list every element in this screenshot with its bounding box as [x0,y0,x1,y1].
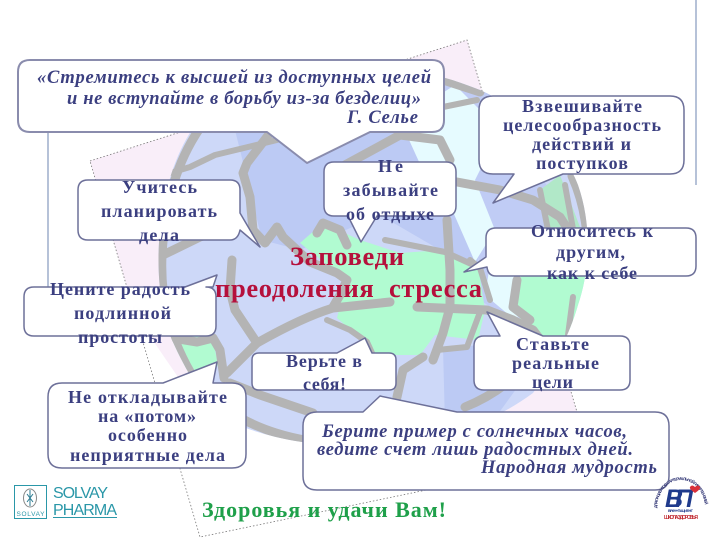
heading: Заповеди [290,241,404,271]
callout: realistic goals [474,312,630,392]
callout: sundial proverb: Берите пример с солнечных часов, [321,422,627,442]
callout: do not postpone: на «потом» [98,406,196,426]
callout: rest: Не [378,156,403,176]
callout: Selye quote: Г. Селье [346,108,418,128]
callout: weigh actions: действий и [532,134,631,154]
decorative side line right [695,0,697,185]
callout: treat others: как к себе [547,263,637,283]
heading: преодоления стресса [215,273,482,303]
callout: do not postpone: особенно [108,425,187,445]
closing wish: Здоровья и удачи Вам! [202,497,446,522]
callout: treat others [464,221,696,283]
logo: Solvay Pharma: SOLVAY [53,485,108,502]
callout: sundial proverb: ведите счет лишь радостных дней. [317,440,633,460]
callout: plan: дела [139,225,179,245]
callout: sundial proverb: Народная мудрость [480,458,657,478]
callout: Selye quote: и не вступайте в борьбу из-за безделиц» [67,89,421,109]
callout: plan: Учитесь [122,177,197,197]
callout: do not postpone: Не откладывайте [68,387,227,407]
heading [215,241,482,303]
logo: school of health: ШКОЛА ЗДОРОВЬЯ [664,515,698,521]
callout: treat others: Относитесь к [531,221,654,241]
logo: school of health: ВП [665,485,694,513]
callout: do not postpone [48,362,246,468]
callout: weigh actions: поступков [536,153,628,173]
callout: rest: об отдыхе [346,204,434,224]
callout: weigh actions [479,96,684,203]
callout: believe in yourself: себя! [303,374,346,394]
globe background image [90,40,610,537]
callout: rest [324,156,456,242]
callout: rest: забывайте [343,180,438,200]
callout: weigh actions: целесообразность [503,115,661,135]
callout: Selye quote: «Стремитесь к высшей из доступных целей [37,68,431,88]
callout: simplicity: Цените радость [50,279,190,299]
callout: realistic goals: Ставьте [516,334,589,354]
callout: simplicity [24,275,217,347]
callout: Selye quote [18,60,444,163]
logo: school of health: ДЛЯ ПАЦИЕНТОВ С АРТЕРИАЛЬНОЙ ГИПЕРТЕНЗИЕЙ [654,477,708,508]
logo: Solvay Pharma: PHARMA [53,502,117,519]
logo: Solvay Pharma [14,485,117,519]
callout: do not postpone: неприятные дела [70,445,225,465]
callout: realistic goals: цели [532,372,573,392]
callout: realistic goals: реальные [512,353,599,373]
logo: school of health [654,477,708,521]
callout: believe in yourself: Верьте в [286,351,362,371]
callout: sundial proverb [303,396,669,490]
callout: simplicity: простоты [78,327,162,347]
decorative side line left [47,132,49,288]
callout: believe in yourself [252,338,396,394]
logo: school of health: ВРАЧ+ПАЦИЕНТ [668,509,694,513]
callout: simplicity: подлинной [74,303,171,323]
callout: weigh actions: Взвешивайте [522,96,642,116]
callout: plan: планировать [101,201,217,221]
callout: plan [78,177,260,247]
logo: Solvay Pharma: SOLVAY [16,511,45,518]
callout: treat others: другим, [556,242,625,262]
